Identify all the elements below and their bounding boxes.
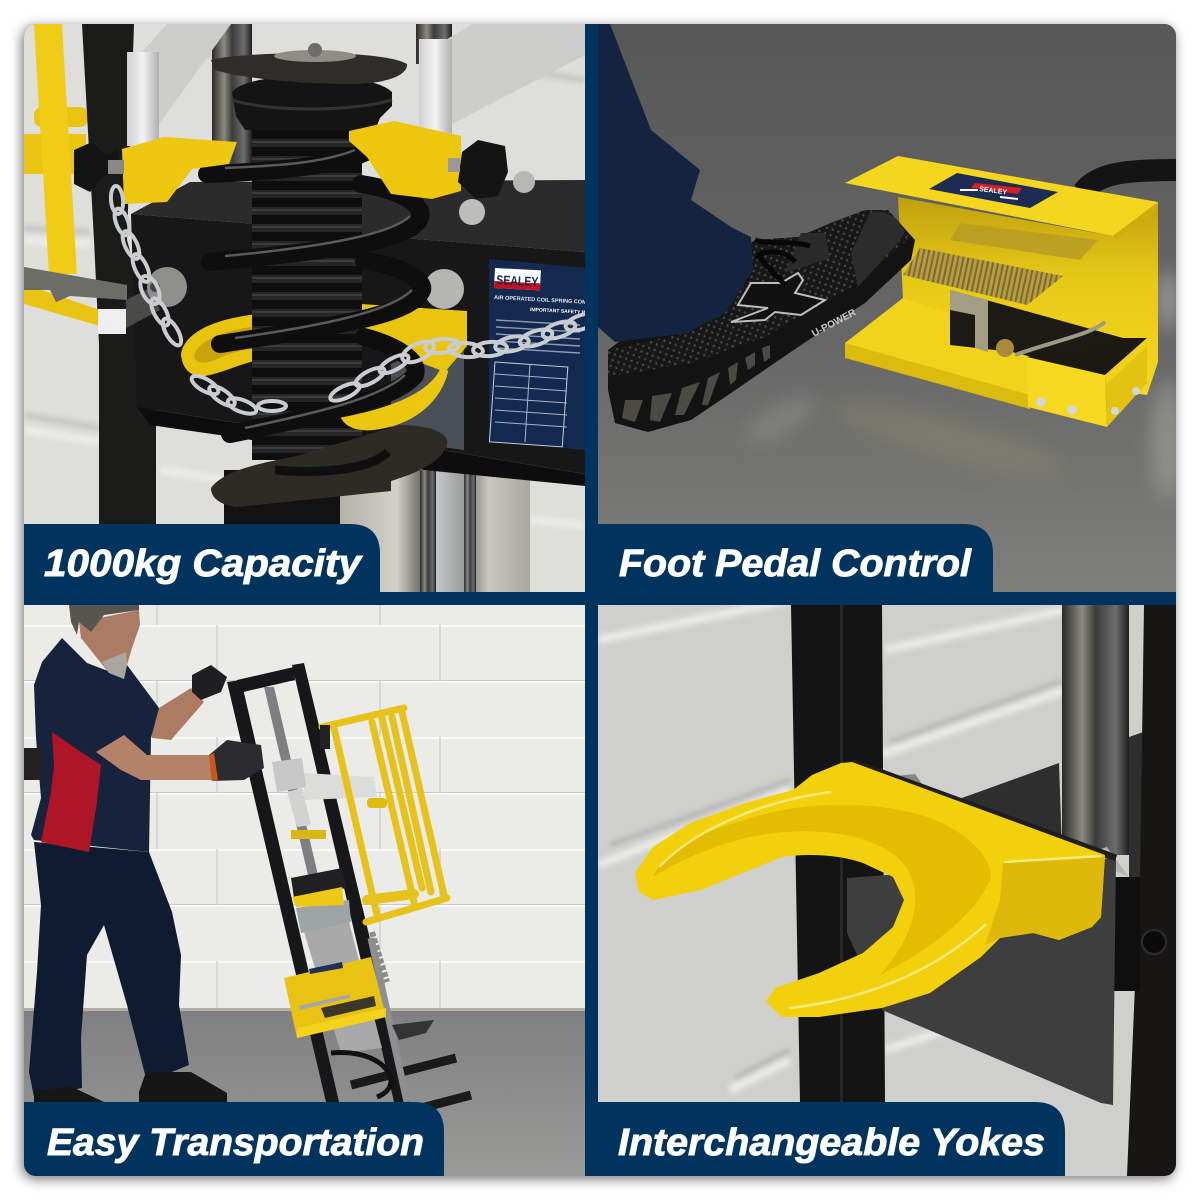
machine rails [227, 680, 339, 1102]
wheel hose [331, 1052, 391, 1097]
yoke front block [985, 857, 1105, 945]
cage mount [320, 725, 330, 749]
yellow yoke fork [635, 762, 1105, 1017]
label: Foot Pedal Control [585, 524, 993, 592]
pedal grating reflection [950, 223, 1098, 260]
label: 1000kg Capacity: 1000kg Capacity [44, 543, 363, 585]
bottom glove [209, 740, 264, 781]
yellow guard cage [322, 708, 447, 922]
polished column [1062, 605, 1129, 855]
steel chain [110, 186, 600, 417]
control label [929, 173, 1058, 208]
black cross plate [291, 868, 346, 898]
man upper arm [151, 688, 204, 740]
rubber bellows [252, 125, 362, 460]
pedal back wall [845, 197, 1158, 395]
threaded rod [371, 938, 407, 1102]
white block and round bracket [98, 267, 187, 334]
white bracket [272, 758, 387, 839]
top glove [192, 665, 227, 700]
man forearm [96, 735, 212, 780]
man trousers [29, 842, 189, 1097]
coil spring [207, 152, 422, 434]
man shirt [31, 638, 159, 852]
floor reflections [738, 270, 1184, 500]
yellow and grey side arm [24, 267, 127, 326]
shoe sole tread [622, 345, 770, 422]
base tray [845, 298, 1028, 394]
machine frame [227, 663, 471, 1115]
yellow left clamp block [122, 137, 237, 204]
yellow small fork [292, 887, 344, 907]
lower central post [224, 470, 340, 524]
cylinder [304, 922, 382, 1053]
shoe brand: U-POWER [810, 307, 859, 340]
panel: 1000kg capacity [24, 24, 600, 592]
machine plate front face [131, 214, 585, 474]
machine legs [351, 1058, 471, 1115]
icon: black knobs and bolts [74, 140, 535, 225]
shoe toe cap [851, 212, 905, 287]
safety sticker: AIR OPERATED COIL SPRING COMPR [494, 295, 594, 306]
shoe mesh upper [608, 210, 911, 377]
man head [79, 610, 140, 679]
white guide rods [127, 39, 452, 146]
bolts [885, 774, 1166, 954]
yoke highlights [660, 792, 1100, 1008]
pedal mechanism [950, 290, 1123, 375]
label: Foot Pedal Control: Foot Pedal Control [619, 543, 972, 585]
panel: interchangeable yokes [598, 600, 1176, 1176]
wall box [24, 748, 42, 780]
silver column behind strut [212, 24, 252, 169]
control label: SEALEY [979, 186, 1008, 196]
lower plate lip [137, 407, 585, 486]
yellow fork lower yoke [181, 304, 467, 376]
left black column [791, 605, 885, 1102]
right black upright [1127, 605, 1176, 1176]
steel cylinder [340, 470, 530, 592]
foot pedal unit [845, 156, 1158, 427]
yoke bowl [653, 805, 991, 975]
shirt red panel [41, 732, 101, 852]
clear air tube [1015, 322, 1105, 355]
machine plate top face [131, 180, 585, 252]
safety sticker [489, 259, 594, 450]
label: 1000kg Capacity [24, 524, 380, 592]
shoe sole [608, 210, 915, 432]
leg in navy trousers [598, 24, 753, 342]
label: Easy Transportation: Easy Transportation [47, 1122, 424, 1164]
bolts [1036, 387, 1140, 415]
label: Interchangeable Yokes: Interchangeable Yokes [618, 1122, 1045, 1164]
safety sticker: SEALEY [496, 272, 539, 289]
spring highlights [225, 150, 412, 428]
air hose [1083, 170, 1176, 192]
black side block [1112, 877, 1140, 991]
panel: foot pedal control [598, 24, 1184, 592]
foot plate [392, 1020, 434, 1040]
man shoes [139, 1072, 227, 1102]
yoke backing plate [847, 858, 1116, 1105]
yellow cage stubs [24, 107, 88, 174]
silver pedal hinge [950, 290, 988, 352]
machine rod [264, 687, 321, 888]
shoe logo [731, 273, 825, 322]
front guard box [1027, 357, 1107, 427]
yellow right clamp block [349, 121, 461, 199]
brass silencer [996, 339, 1014, 357]
bottom spring seat [211, 425, 447, 507]
plate top rim [852, 762, 1116, 858]
safety sticker: IMPORTANT SAFETY IN [530, 307, 587, 316]
shoe laces [755, 240, 810, 285]
aluminium top plates [142, 24, 585, 127]
black upright column [82, 24, 156, 524]
yellow pedal box [284, 957, 386, 1038]
shoe tongue [785, 233, 830, 273]
man hair [69, 605, 139, 635]
top cover plate [845, 156, 1158, 236]
yellow yoke crescent [344, 370, 446, 428]
dark shelf [948, 763, 1116, 877]
top spring mount [211, 43, 407, 130]
label: Easy Transportation [24, 1102, 444, 1176]
pedal plate [903, 248, 1063, 305]
man [29, 605, 264, 1102]
man beard [102, 652, 127, 679]
black safety shoe [608, 210, 915, 432]
silver bracket [391, 350, 464, 450]
chain [372, 932, 387, 982]
panel: easy transportation [24, 605, 585, 1176]
grey mount plate [296, 900, 351, 933]
plate hole [424, 269, 464, 309]
label: Interchangeable Yokes [585, 1102, 1065, 1176]
yellow cage tube [34, 24, 77, 274]
